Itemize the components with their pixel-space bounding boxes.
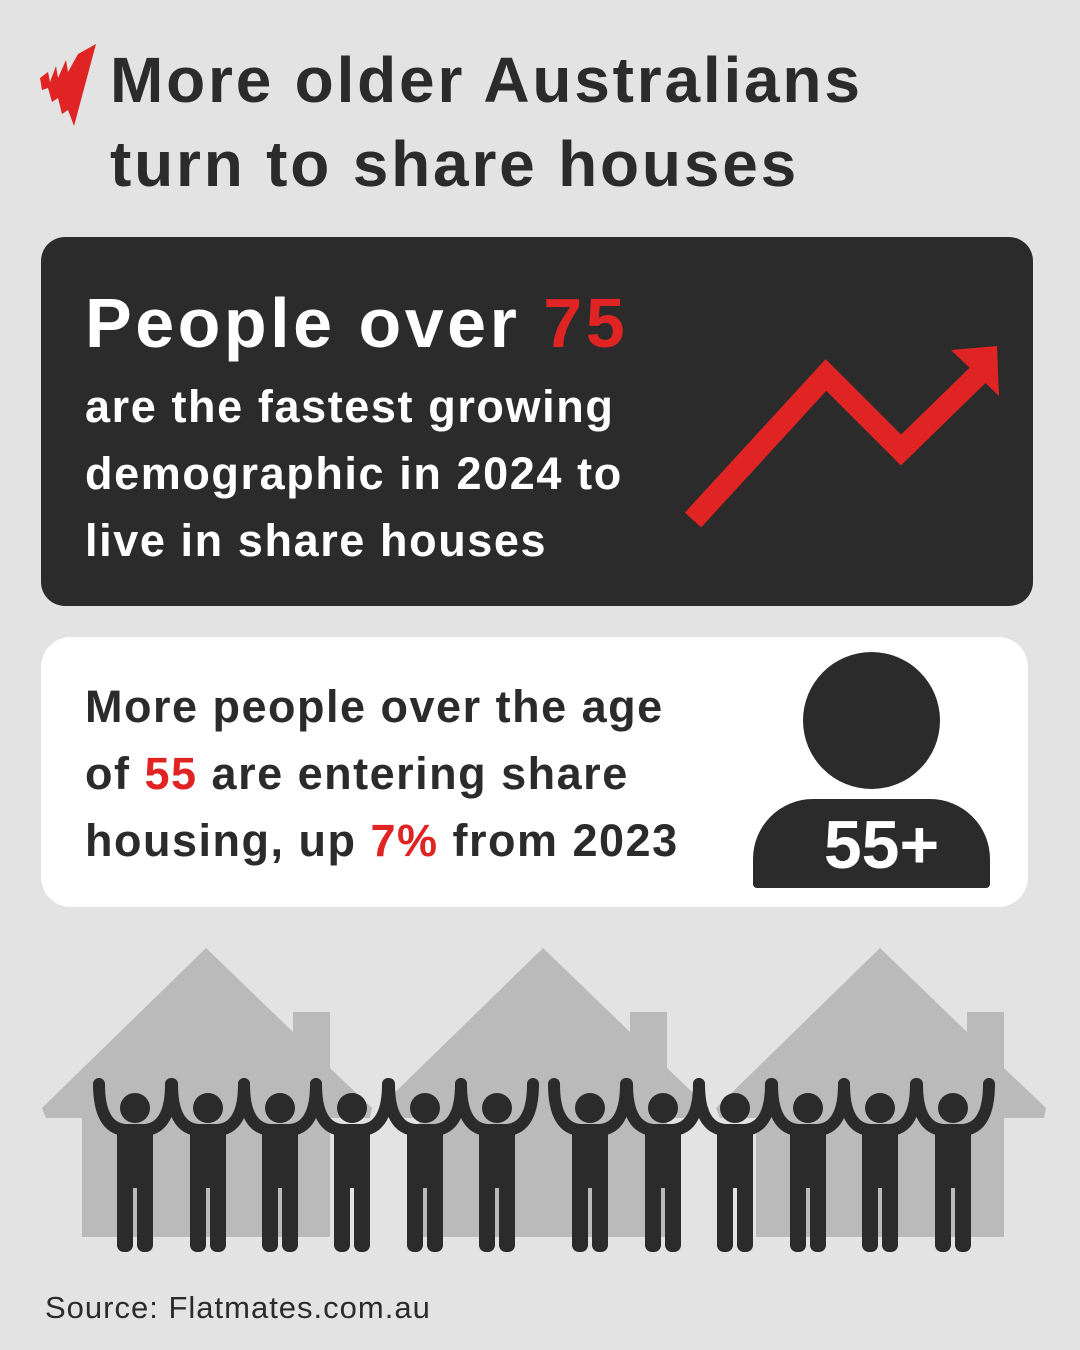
- text block: demographic in 2024 to: [85, 448, 623, 499]
- title: turn to share houses: [110, 128, 799, 200]
- text block: are the fastest growing: [85, 381, 614, 432]
- title: More older Australians: [110, 44, 863, 116]
- icon: person 55+: 55+: [824, 807, 939, 883]
- text block: live in share houses: [85, 515, 547, 566]
- text block: [85, 681, 679, 866]
- panel: over 55: [41, 637, 1028, 907]
- heading: people over 75: People over 75: [85, 284, 628, 362]
- text block: of 55 are entering share: [85, 748, 629, 799]
- icon: person 55+: [753, 652, 990, 888]
- text block: housing, up 7% from 2023: [85, 815, 679, 866]
- title: [110, 44, 863, 200]
- source: Source: Flatmates.com.au: [45, 1290, 431, 1325]
- panel: over 75: [41, 237, 1033, 606]
- text block: [85, 381, 623, 566]
- logo: [40, 44, 96, 126]
- illustration: houses and people: [42, 948, 1046, 1252]
- icon: rising arrow: [685, 346, 999, 528]
- text block: More people over the age: [85, 681, 664, 732]
